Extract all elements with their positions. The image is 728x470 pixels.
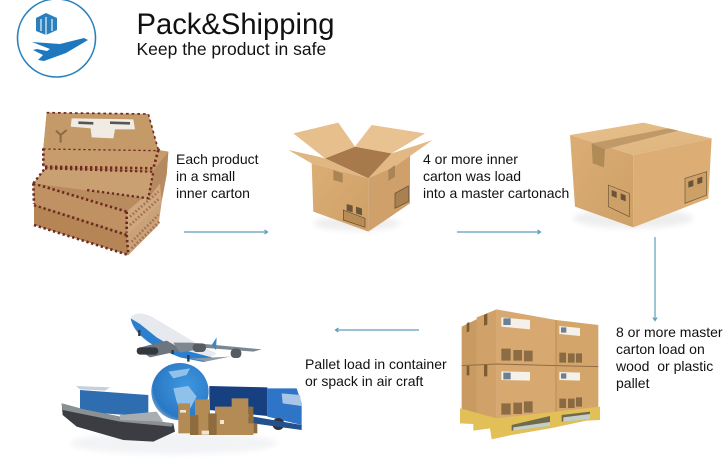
label: step 2: carton was load (423, 168, 521, 184)
title: Pack&Shipping (136, 9, 334, 41)
image: sealed master carton (570, 123, 712, 228)
image: plane, globe, ship, cartons and truck (62, 313, 302, 454)
logo icon: plane and parcel in a circle (18, 0, 96, 77)
label: step 2 (423, 151, 569, 201)
truck (209, 386, 302, 430)
label: step 1: inner carton (176, 185, 250, 201)
subtitle: Keep the product in safe (136, 39, 326, 59)
label: step 1 (176, 151, 259, 201)
image: stack of airmail inner cartons (33, 113, 168, 255)
arrow: step 2 to step 3 (457, 230, 540, 234)
label: step 2: 4 or more inner (423, 151, 518, 167)
globe (151, 363, 209, 420)
label: step 2: into a master cartonach (423, 185, 569, 201)
label: step 3: pallet (616, 375, 650, 391)
image: open inner carton (288, 123, 433, 232)
container ship (62, 386, 175, 442)
label: step 3: wood or plastic (615, 358, 713, 374)
image: cartons on a wooden pallet (460, 309, 600, 439)
arrow: step 3 to step 4 (653, 237, 657, 320)
label: step 4: Pallet load in container (305, 356, 447, 372)
stack of cartons (178, 398, 257, 435)
arrow: step 1 to step 2 (184, 230, 268, 234)
label: step 4: or spack in air craft (305, 373, 423, 389)
airplane (131, 313, 262, 362)
label: step 4 (305, 356, 447, 389)
label: step 1: in a small (176, 168, 235, 184)
label: step 3 (615, 324, 723, 391)
arrow: step 4 to step 5 (336, 328, 419, 332)
label: step 1: Each product (176, 151, 259, 167)
label: step 3: carton load on (616, 341, 705, 357)
label: step 3: 8 or more master (616, 324, 723, 340)
